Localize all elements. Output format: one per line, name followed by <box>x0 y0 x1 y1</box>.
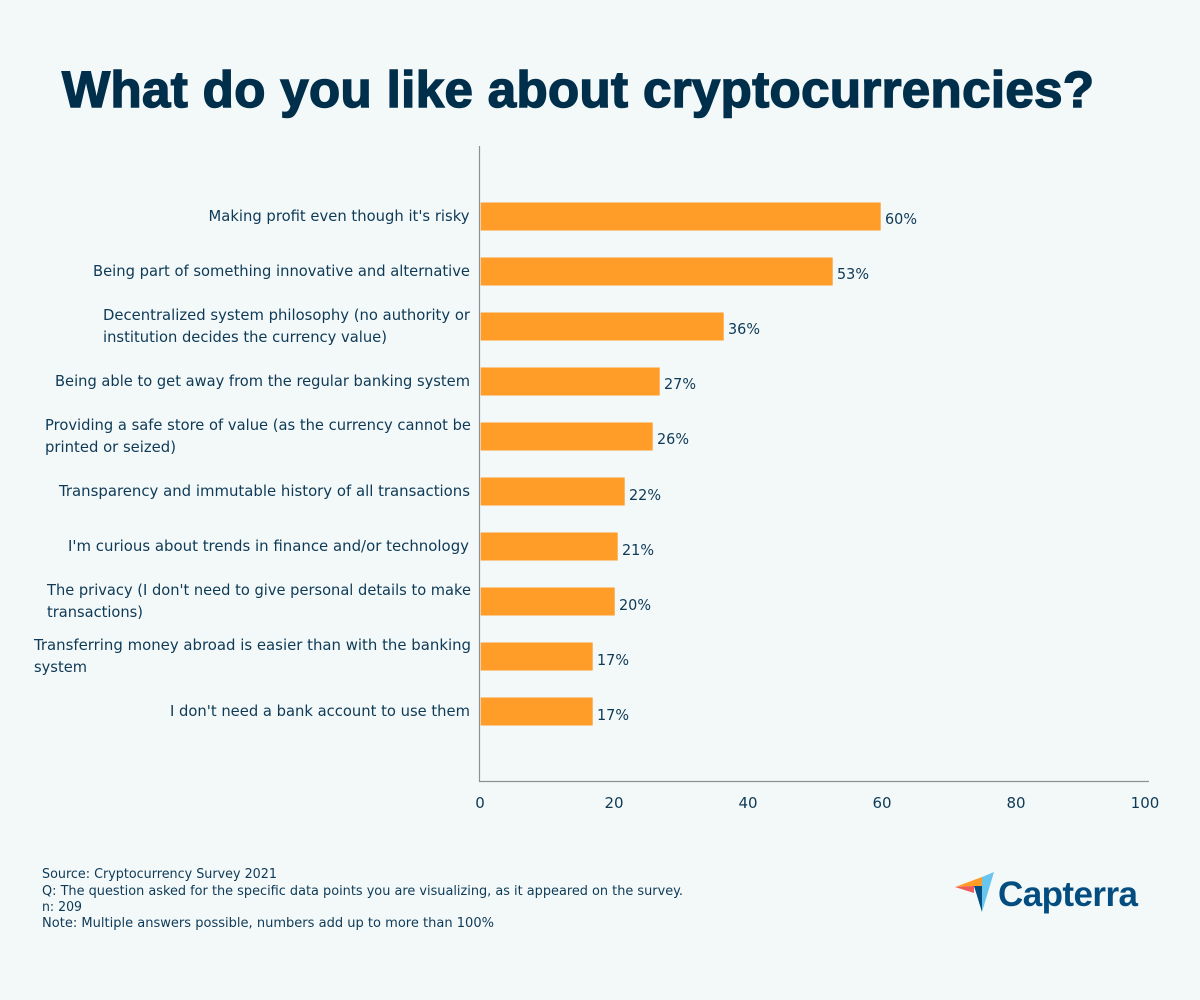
x axis labels: 80 <box>1006 794 1026 812</box>
title: What do you like about cryptocurrencies? <box>62 61 1094 118</box>
value labels: 53% <box>837 265 869 283</box>
category labels: printed or seized) <box>45 438 176 456</box>
value labels: 21% <box>622 541 654 559</box>
bars <box>481 202 881 726</box>
value labels: 27% <box>664 375 696 393</box>
category labels: Transparency and immutable history of all transactions <box>58 482 470 500</box>
value labels: 17% <box>597 651 629 669</box>
source notes: Q: The question asked for the specific data points you are visualizing, as it appeared on the survey. <box>42 884 683 899</box>
value labels: 36% <box>728 320 760 338</box>
category labels: I don't need a bank account to use them <box>170 702 470 720</box>
source notes: n: 209 <box>42 900 82 915</box>
value labels <box>597 210 917 724</box>
x axis labels: 60 <box>872 794 892 812</box>
category labels: Making profit even though it's risky <box>208 207 470 225</box>
logo: Capterra <box>955 872 1139 914</box>
category labels: Being able to get away from the regular banking system <box>55 372 470 390</box>
x axis labels: 0 <box>475 794 485 812</box>
source notes: Source: Cryptocurrency Survey 2021 <box>42 867 277 882</box>
x axis labels <box>475 794 1159 812</box>
value labels: 20% <box>619 596 651 614</box>
value labels: 17% <box>597 706 629 724</box>
bar chart <box>33 146 1159 812</box>
category labels <box>33 207 471 720</box>
axes <box>480 146 1149 782</box>
x axis labels: 100 <box>1131 794 1159 812</box>
category labels: Being part of something innovative and alternative <box>93 262 470 280</box>
category labels: Providing a safe store of value (as the currency cannot be <box>45 416 471 434</box>
x axis labels: 20 <box>604 794 624 812</box>
value labels: 26% <box>657 430 689 448</box>
value labels: 60% <box>885 210 917 228</box>
source notes: Note: Multiple answers possible, numbers add up to more than 100% <box>42 916 494 931</box>
category labels: institution decides the currency value) <box>103 328 387 346</box>
value labels: 22% <box>629 486 661 504</box>
x axis labels: 40 <box>738 794 758 812</box>
category labels: The privacy (I don't need to give personal details to make <box>46 581 471 599</box>
category labels: system <box>34 658 87 676</box>
logo wordmark: Capterra <box>998 875 1139 914</box>
category labels: Decentralized system philosophy (no authority or <box>103 306 471 324</box>
source notes <box>42 867 683 931</box>
category labels: I'm curious about trends in finance and/or technology <box>68 537 469 555</box>
category labels: Transferring money abroad is easier than with the banking <box>33 636 471 654</box>
icon: Capterra arrow <box>955 872 994 912</box>
category labels: transactions) <box>47 603 143 621</box>
